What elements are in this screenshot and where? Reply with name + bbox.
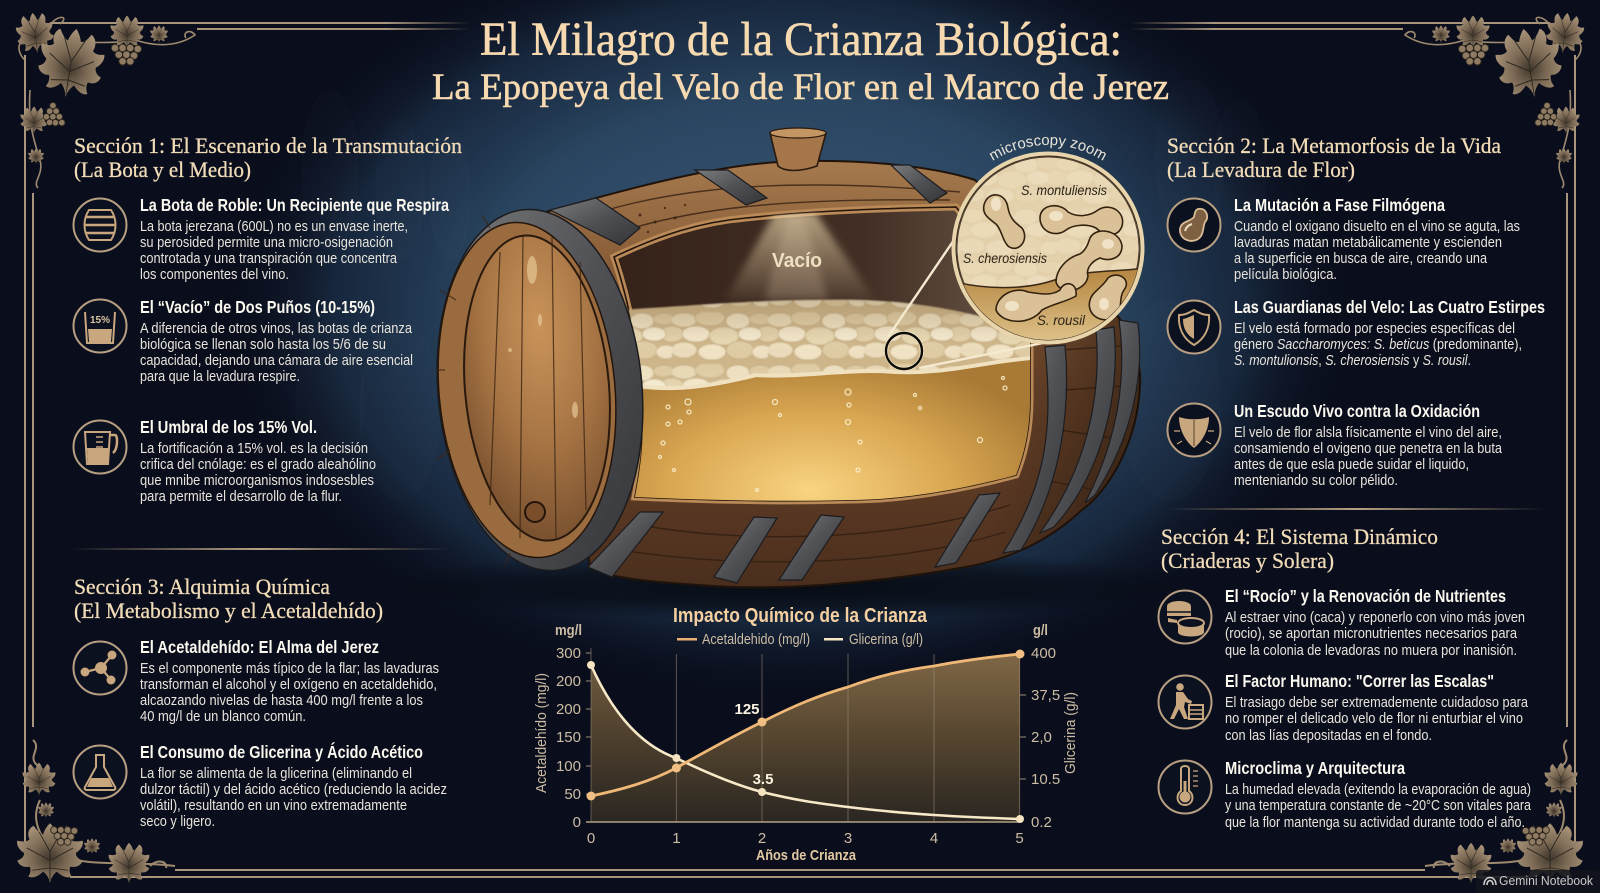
text: El Acetaldehído: El Acetaldehído: El Alma del Jerez bbox=[140, 637, 379, 657]
text: El Acetaldehído: alcaozando nivelas de hasta 400 mg/l frente a los bbox=[140, 692, 423, 709]
icon: shield bbox=[1168, 300, 1220, 354]
text: El Rocío: Al estraer vino (caca) y reponerlo con vino más joven bbox=[1225, 609, 1525, 626]
section 3 heading: Sección 3: Alquimia Química bbox=[74, 574, 330, 599]
icon: cellar worker bbox=[1158, 676, 1212, 728]
section 4 heading: Sección 4: El Sistema Dinámico bbox=[1161, 524, 1438, 549]
bubbles bbox=[658, 376, 1007, 492]
x axis: 3 bbox=[844, 830, 852, 847]
title bbox=[432, 13, 1169, 108]
yeast cells bbox=[984, 195, 1126, 321]
icon: measuring jug bbox=[74, 420, 126, 474]
text: El Rocío: que la colonia de levadoras no muera por inanisión. bbox=[1225, 642, 1517, 659]
right axis: 10.5 bbox=[1031, 771, 1060, 788]
section 4 heading bbox=[1161, 524, 1438, 573]
text: El Consumo de Glicerina: volátil), resultando en un vino extremadamente bbox=[140, 797, 407, 814]
watermark: Gemini Notebook bbox=[1476, 870, 1600, 893]
text: El Vacío de Dos Puños: capacidad, dejando una cámara de aire esencial bbox=[140, 352, 413, 369]
grid and axes bbox=[586, 648, 1026, 822]
title: La Epopeya del Velo de Flor en el Marco de Jerez bbox=[432, 67, 1169, 108]
text: La Mutación a Fase Filmógena: a la superficie en busca de aire, creando una bbox=[1234, 250, 1488, 267]
x axis: 1 bbox=[672, 830, 681, 847]
x axis: 4 bbox=[930, 830, 938, 847]
text: La Mutación a Fase Filmógena: lavaduras matan metabálicamente y escienden bbox=[1234, 234, 1502, 251]
text: Microclima y Arquitectura: Microclima y Arquitectura bbox=[1225, 758, 1405, 778]
text: La Mutación a Fase Filmógena: película biológica. bbox=[1234, 266, 1337, 283]
text: El Factor Humano: El Factor Humano: "Correr las Escalas" bbox=[1225, 671, 1494, 691]
chart title: Impacto Químico de la Crianza bbox=[673, 605, 928, 627]
barrel ground shadow bbox=[390, 549, 1190, 621]
section 4 panel bbox=[1158, 524, 1532, 831]
spigot plug bbox=[525, 502, 545, 522]
icon: living shield bbox=[1168, 404, 1220, 456]
text: La Bota de Roble: los componentes del vino. bbox=[140, 266, 289, 283]
liquid wine bbox=[635, 360, 1030, 501]
text: El Umbral de los 15% Vol.: crifica del cnólage: es el grado aleahólino bbox=[140, 456, 376, 473]
text: El Consumo de Glicerina bbox=[140, 741, 447, 830]
x axis: 5 bbox=[1015, 830, 1024, 847]
text: El Vacío de Dos Puños: biológica se llenan solo hasta los 5/6 de su bbox=[140, 336, 386, 353]
text: El Consumo de Glicerina: La flor se alimenta de la glicerina (eliminando el bbox=[140, 765, 412, 782]
left axis: 300 bbox=[556, 645, 581, 662]
chart legend: Glicerina (g/l) bbox=[849, 632, 923, 648]
right axis: 2,0 bbox=[1031, 729, 1052, 746]
text: Las Guardianas del Velo: género Saccharomyces: S. beticus (predominante), bbox=[1234, 336, 1522, 353]
left axis: 50 bbox=[564, 786, 581, 803]
iron hoops bbox=[550, 165, 1140, 583]
x axis bbox=[587, 830, 1024, 864]
section 2 panel bbox=[1167, 133, 1545, 489]
icon: flask bbox=[74, 746, 126, 798]
left axis: 100 bbox=[556, 758, 581, 775]
zoom marker circle and leader lines bbox=[886, 237, 1058, 369]
x axis: 2 bbox=[758, 830, 766, 847]
text: Un Escudo Vivo bbox=[1234, 401, 1503, 489]
barrel body bbox=[546, 161, 1140, 587]
text: El Acetaldehído bbox=[140, 637, 439, 725]
text: El Consumo de Glicerina: dulzor táctil) y del ácido acético (reduciendo la acidez bbox=[140, 781, 447, 798]
right axis: 400 bbox=[1031, 645, 1056, 662]
text: El Consumo de Glicerina: El Consumo de Glicerina y Ácido Acético bbox=[140, 741, 423, 762]
right axis: 0.2 bbox=[1031, 814, 1052, 831]
text: El Acetaldehído: 40 mg/l de un blanco común. bbox=[140, 708, 306, 725]
wood grain spots bbox=[629, 204, 686, 233]
text: La Mutación a Fase Filmógena: La Mutación a Fase Filmógena bbox=[1234, 195, 1445, 215]
section 3 heading: (El Metabolismo y el Acetaldehído) bbox=[74, 598, 383, 623]
text: El Rocío: (rocio), se aportan micronutrientes necesarios para bbox=[1225, 625, 1518, 642]
label: Vacío: Vacío bbox=[772, 250, 822, 272]
icon: yeast cell bbox=[1168, 198, 1220, 252]
text: Microclima y Arquitectura: La humedad elevada (exitendo la evaporación de agua) bbox=[1225, 781, 1531, 798]
section 4 heading: (Criaderas y Solera) bbox=[1161, 548, 1334, 573]
species labels: S. montuliensis bbox=[1021, 182, 1107, 198]
text: Un Escudo Vivo: antes de que esla puede suidar el liquido, bbox=[1234, 456, 1469, 473]
text: Un Escudo Vivo: El velo de flor alsla físicamente el vino del aire, bbox=[1234, 424, 1502, 441]
bung cork bbox=[770, 128, 826, 170]
section 2 heading: (La Levadura de Flor) bbox=[1167, 157, 1355, 182]
text: Un Escudo Vivo: Un Escudo Vivo contra la Oxidación bbox=[1234, 401, 1480, 421]
microscopy zoom lens bbox=[952, 137, 1144, 344]
text: La Mutación a Fase Filmógena bbox=[1234, 195, 1520, 283]
text: La Bota de Roble: su perosided permite una micro-osigenación bbox=[140, 234, 393, 251]
text: Un Escudo Vivo: consamiendo el ovigeno que penetra en la buta bbox=[1234, 440, 1503, 457]
data labels: 125 bbox=[734, 701, 760, 718]
section 2 heading: Sección 2: La Metamorfosis de la Vida bbox=[1167, 133, 1501, 158]
text: El Vacío de Dos Puños: El “Vacío” de Dos Puños (10-15%) bbox=[140, 297, 375, 317]
right axis bbox=[1031, 622, 1079, 831]
x axis: 0 bbox=[587, 830, 595, 847]
section 3 panel bbox=[74, 574, 447, 830]
section 1 heading: (La Bota y el Medio) bbox=[74, 157, 251, 182]
section 1 panel bbox=[74, 133, 462, 505]
icon: beaker 15%: 15% bbox=[90, 315, 110, 326]
barrel front head bbox=[423, 201, 657, 579]
text: El Umbral de los 15% Vol.: que mnibe microorganismos indosesbles bbox=[140, 472, 374, 489]
text: El Rocío: El “Rocío” y la Renovación de Nutrientes bbox=[1225, 586, 1506, 606]
text: Las Guardianas del Velo: S. montulionsis, S. cherosiensis y S. rousil. bbox=[1234, 352, 1471, 369]
text: El Vacío de Dos Puños bbox=[140, 297, 413, 385]
text: El Acetaldehído: transforman el alcohol y el oxígeno en acetaldehido, bbox=[140, 676, 437, 693]
left axis: 0 bbox=[573, 814, 581, 831]
text: El Factor Humano: con las lías depositadas en el fondo. bbox=[1225, 727, 1432, 744]
section 3 heading bbox=[74, 574, 383, 623]
line chart: Impacto Químico de la Crianza bbox=[533, 605, 1079, 864]
icon: stacked barrels bbox=[1158, 590, 1212, 644]
species labels bbox=[963, 182, 1107, 328]
section 1 heading: Sección 1: El Escenario de la Transmutación bbox=[74, 133, 462, 158]
text: Microclima y Arquitectura bbox=[1225, 758, 1532, 831]
data labels bbox=[734, 701, 773, 788]
text: El Vacío de Dos Puños: para que la levadura respire. bbox=[140, 368, 300, 385]
left axis bbox=[533, 622, 582, 831]
chart legend: Acetaldehido (mg/l) bbox=[702, 632, 810, 648]
icon: barrel bbox=[74, 198, 126, 252]
text: El Acetaldehído: Es el componente más típico de la flar; las lavaduras bbox=[140, 660, 439, 677]
corner ornament: top left vine bbox=[14, 10, 195, 188]
text: La Bota de Roble bbox=[140, 195, 449, 283]
caption: microscopy zoom: microscopy zoom bbox=[990, 137, 1106, 160]
text: El Umbral de los 15% Vol.: La fortificación a 15% vol. es la decisión bbox=[140, 440, 368, 457]
chart legend bbox=[677, 632, 923, 648]
text: El Factor Humano bbox=[1225, 671, 1529, 744]
text: El Vacío de Dos Puños: A diferencia de otros vinos, las botas de crianza bbox=[140, 320, 413, 337]
section 1 heading bbox=[74, 133, 462, 182]
text: Microclima y Arquitectura: que la flor mantenga su actividad durante todo el año. bbox=[1225, 814, 1525, 831]
title: El Milagro de la Crianza Biológica: bbox=[480, 13, 1122, 66]
icon: thermometer bbox=[1158, 760, 1212, 814]
data labels: 3.5 bbox=[753, 771, 773, 788]
text: El Umbral de los 15% Vol. bbox=[140, 417, 376, 505]
text: El Consumo de Glicerina: seco y ligero. bbox=[140, 813, 215, 830]
right axis: g/l bbox=[1033, 622, 1048, 639]
text: El Factor Humano: no romper el delicado velo de flor ni enturbiar el vino bbox=[1225, 710, 1523, 727]
x axis: Años de Crianza bbox=[756, 847, 857, 864]
species labels: S. cherosiensis bbox=[963, 250, 1047, 266]
species labels: S. rousil bbox=[1037, 312, 1086, 328]
corner ornament: bottom right vine bbox=[1425, 740, 1583, 883]
icon: beaker 15% bbox=[74, 300, 126, 352]
left axis: Acetaldehído (mg/l) bbox=[533, 673, 550, 793]
illustration: barrel cutaway bbox=[436, 127, 1144, 617]
text: Las Guardianas del Velo: El velo está formado por especies específicas del bbox=[1234, 320, 1515, 337]
right axis: Glicerina (g/l) bbox=[1062, 692, 1079, 774]
cut-away interior bbox=[614, 207, 1040, 508]
text: La Bota de Roble: La Bota de Roble: Un Recipiente que Respira bbox=[140, 195, 449, 215]
right axis: 37,5 bbox=[1031, 687, 1060, 704]
left axis: mg/l bbox=[555, 622, 582, 639]
acetaldehyde curve bbox=[586, 650, 1024, 800]
text: El Rocío bbox=[1225, 586, 1525, 659]
left axis: 200 bbox=[556, 701, 581, 718]
text: La Bota de Roble: controtada y una transpiración que concentra bbox=[140, 250, 398, 267]
light rays in headspace bbox=[725, 212, 875, 300]
glycerine curve bbox=[587, 661, 1024, 823]
flor veil foam bbox=[620, 300, 1035, 389]
text: La Mutación a Fase Filmógena: Cuando el oxigano disuelto en el vino se aguta, las bbox=[1234, 218, 1520, 235]
corner ornament: top right vine bbox=[1405, 10, 1586, 188]
section 2 heading bbox=[1167, 133, 1501, 182]
watermark: Gemini Notebook: Gemini Notebook bbox=[1499, 874, 1594, 888]
icon: molecule bbox=[74, 642, 126, 694]
text: Las Guardianas del Velo bbox=[1234, 297, 1545, 369]
left axis: 150 bbox=[556, 729, 581, 746]
text: La Bota de Roble: La bota jerezana (600L) no es un envase inerte, bbox=[140, 218, 408, 235]
area fills bbox=[591, 654, 1020, 822]
text: El Umbral de los 15% Vol.: El Umbral de los 15% Vol. bbox=[140, 417, 317, 437]
corner ornament: bottom left vine bbox=[17, 740, 175, 883]
text: El Umbral de los 15% Vol.: para permite el desarrollo de la flur. bbox=[140, 488, 342, 505]
text: Un Escudo Vivo: menteniando su color pélido. bbox=[1234, 472, 1398, 489]
text: El Factor Humano: El trasiago debe ser extremademente cuidadoso para bbox=[1225, 694, 1529, 711]
text: Microclima y Arquitectura: y una temperatura constante de ~20°C son vitales para bbox=[1225, 797, 1532, 814]
left axis: 200 bbox=[556, 673, 581, 690]
